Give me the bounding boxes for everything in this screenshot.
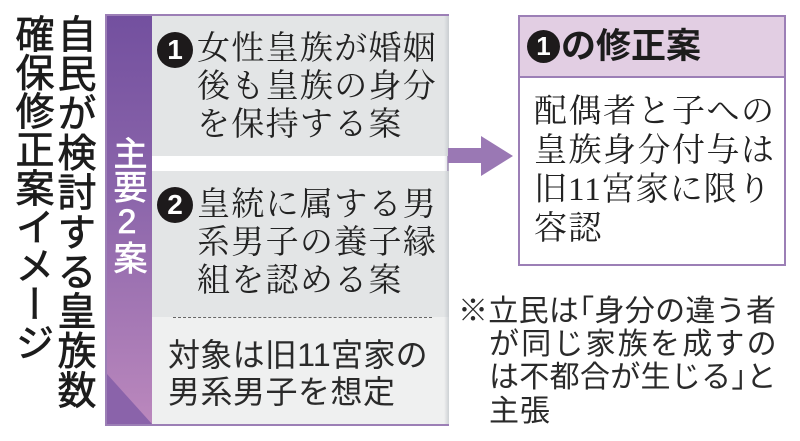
badge 2 (157, 187, 193, 223)
proposal 1 text: 女性皇族が婚姻 (197, 31, 437, 67)
sidebar corner fold (107, 374, 152, 424)
badge 2: 2 (167, 189, 183, 220)
proposal 2 text (197, 187, 437, 299)
proposal 2 text: 皇統に属する男 (197, 187, 437, 223)
sidebar label: 主要2案 (108, 136, 146, 274)
proposal 2 text: 系男子の養子縁 (197, 225, 437, 261)
proposal 1 text: 後も皇族の身分 (197, 69, 437, 105)
badge 1: 1 (167, 34, 183, 65)
revision body text: 皇族身分付与は (534, 133, 776, 169)
proposal 1 text: を保持する案 (197, 107, 403, 143)
proposal 2 text: 組を認める案 (197, 263, 403, 299)
footnote: は不都合が生じる」と (489, 361, 777, 394)
target note panel (152, 317, 449, 424)
title line 1: 自民が検討する皇族数 (52, 14, 95, 410)
footnote: が同じ家族を成すの (489, 328, 779, 361)
header title: の修正案 (561, 27, 701, 66)
target note text: 対象は旧11宮家の (168, 337, 428, 373)
target note text: 男系男子を想定 (168, 374, 396, 410)
panel right edge shading (444, 16, 449, 424)
header badge: 1 (536, 31, 551, 61)
footnote: ※立民は「身分の違う者 (458, 295, 776, 328)
dashed separator (173, 317, 432, 318)
revision body text: 配偶者と子への (534, 94, 776, 130)
title line 2: 確保修正案イメージ (10, 14, 53, 361)
footnote: 主張 (489, 395, 551, 428)
revision body text: 旧11宮家に限り (534, 172, 772, 208)
proposal 1 text (197, 31, 437, 143)
arrow (448, 136, 513, 176)
revision body text: 容認 (534, 211, 603, 247)
badge 1 (157, 32, 193, 68)
target note text (168, 337, 428, 410)
revision body text (534, 94, 776, 247)
proposal 1 panel (152, 16, 449, 156)
revision header (520, 17, 784, 78)
panel: proposal 1 revision (518, 15, 786, 266)
proposal 2 panel (152, 171, 449, 317)
footnote (458, 295, 779, 428)
title: vertical heading (10, 14, 96, 410)
panel: main two proposals (105, 14, 449, 426)
sidebar: main two proposals (107, 16, 152, 424)
header badge (527, 30, 560, 63)
